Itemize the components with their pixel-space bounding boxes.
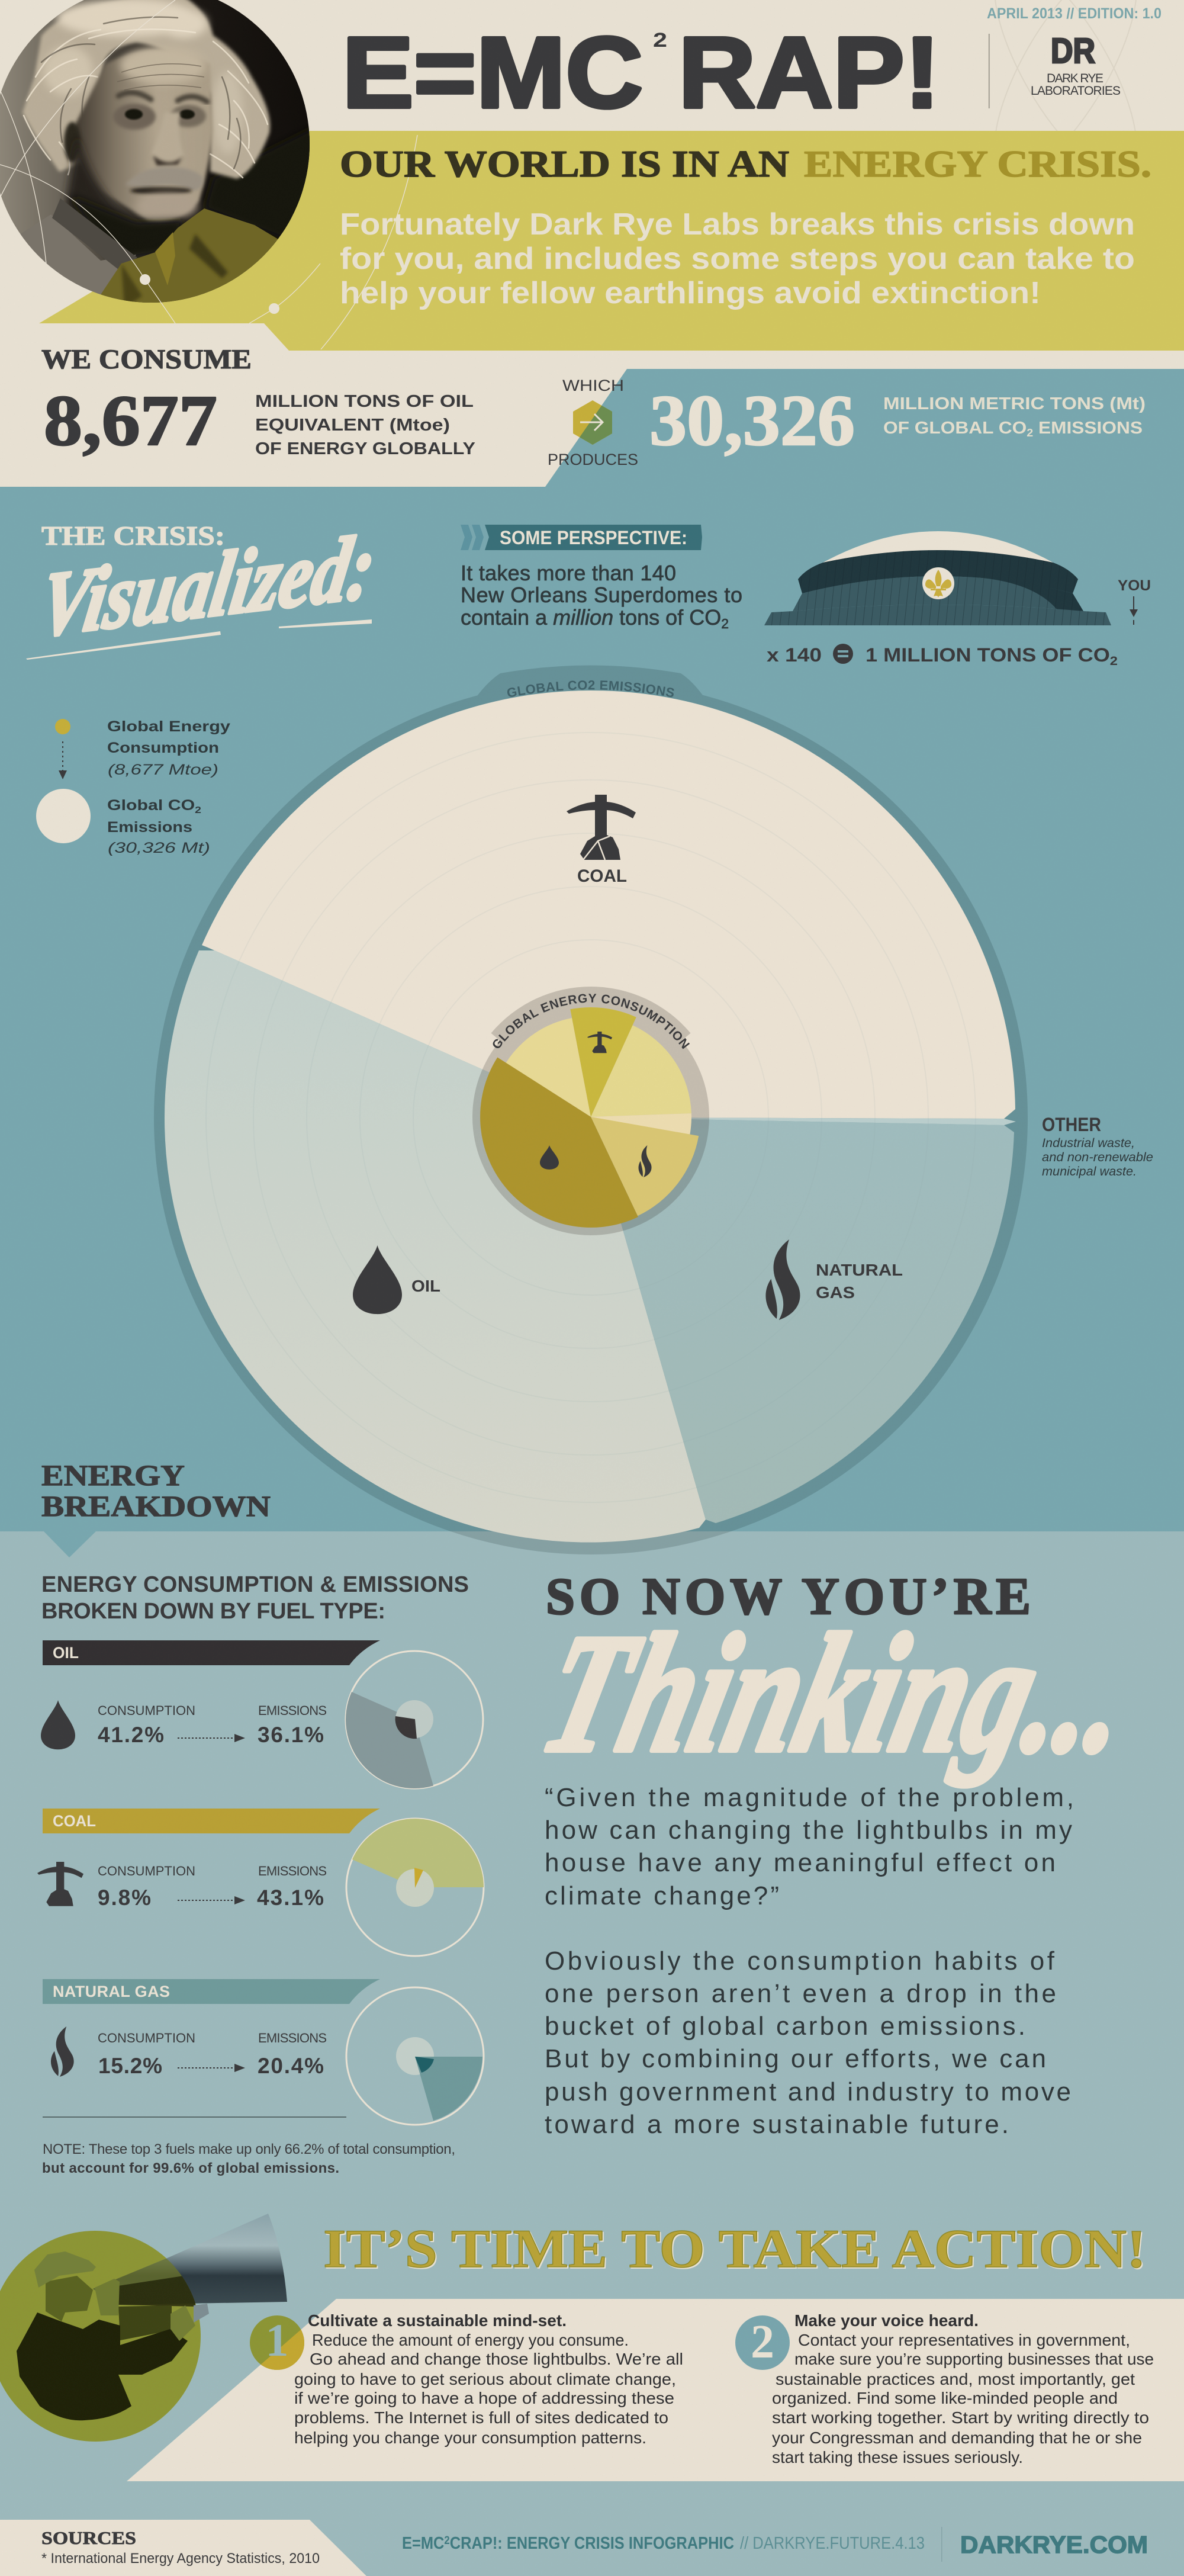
subheading: breakdown bbox=[41, 1572, 469, 1624]
dark interior bbox=[118, 2305, 172, 2340]
label: other bbox=[1042, 1114, 1153, 1178]
cap bbox=[34, 2251, 96, 2288]
logo: Dark Rye Laboratories: LABORATORIES bbox=[1031, 84, 1121, 98]
orbit lines with dots bbox=[0, 0, 417, 349]
row: coal bbox=[37, 1809, 484, 1956]
explanation paragraph: bucket of global carbon emissions. bbox=[545, 2012, 1025, 2041]
step 1 text: going to have to get serious about climate change, bbox=[294, 2370, 676, 2388]
equation: 140 superdomes bbox=[767, 644, 1118, 668]
row: oil: CONSUMPTION bbox=[98, 1703, 195, 1718]
stat: we consume bbox=[41, 344, 475, 461]
row: coal: 43.1% bbox=[257, 1886, 324, 1910]
ring label bbox=[379, 689, 803, 746]
label: oil: OIL bbox=[411, 1277, 440, 1295]
row: natural gas: CONSUMPTION bbox=[98, 2031, 195, 2045]
heading: it's time to take action: IT’S TIME TO TAKE ACTION! bbox=[324, 2220, 1147, 2280]
stat: emissions: 2 bbox=[1027, 427, 1033, 439]
title bbox=[342, 17, 940, 129]
legend bbox=[36, 718, 230, 856]
forehead highlight and wrinkles bbox=[120, 46, 205, 84]
yellow intro band bbox=[39, 131, 1184, 351]
legend: Global CO bbox=[107, 797, 179, 814]
icon: superdome bbox=[764, 531, 1111, 625]
connector: which produces bbox=[548, 377, 638, 468]
step 2 text: your Congressman and demanding that he or she bbox=[772, 2429, 1142, 2447]
row: natural gas: NATURAL GAS bbox=[53, 1983, 170, 2000]
quote paragraph: house have any meaningful effect on bbox=[545, 1848, 1056, 1877]
legend: Global Energy bbox=[107, 718, 230, 735]
nose bbox=[151, 113, 184, 161]
explanation paragraph: push government and industry to move bbox=[545, 2077, 1071, 2106]
row: coal: CONSUMPTION bbox=[98, 1864, 195, 1878]
explanation paragraph: Obviously the consumption habits of bbox=[545, 1947, 1055, 1976]
quote paragraph: “Given the magnitude of the problem, bbox=[545, 1783, 1074, 1812]
row: oil: OIL bbox=[53, 1644, 79, 1662]
hair mass bbox=[22, 0, 270, 179]
quote paragraph bbox=[545, 1783, 1074, 1910]
intro paragraph: Fortunately Dark Rye Labs breaks this crisis down bbox=[340, 207, 1135, 242]
row: coal: EMISSIONS bbox=[258, 1864, 327, 1878]
teal background section bbox=[0, 369, 1184, 1531]
footer credit: CRAP!: ENERGY CRISIS INFOGRAPHIC bbox=[450, 2534, 734, 2553]
wedge: oil bbox=[165, 950, 706, 1543]
sweater olive side bbox=[92, 208, 284, 314]
chart: global energy consumption pie: GLOBAL ENERGY CONSUMPTION bbox=[493, 994, 690, 1049]
footer credit: 2 bbox=[444, 2535, 450, 2547]
body bbox=[17, 2312, 188, 2420]
logo: Dark Rye Laboratories: DR bbox=[1051, 31, 1095, 70]
edition note: APRIL 2013 // EDITION: 1.0 bbox=[987, 5, 1162, 22]
hands bbox=[170, 2305, 195, 2341]
note: NOTE: These top 3 fuels make up only 66.2% of total consumption, bbox=[43, 2141, 455, 2157]
sources box: SOURCES bbox=[41, 2527, 136, 2548]
illustration: man with megaphone bbox=[0, 2214, 287, 2442]
step 1 text: helping you change your consumption patterns. bbox=[294, 2429, 646, 2447]
lower pale section bbox=[0, 1531, 1184, 2576]
neck shadow bbox=[70, 195, 184, 261]
tab pointer bbox=[44, 1531, 96, 1557]
quote paragraph: how can changing the lightbulbs in my bbox=[545, 1816, 1072, 1845]
banner: some perspective bbox=[461, 525, 702, 550]
row: coal: COAL bbox=[53, 1812, 96, 1830]
heading: so now you're: SO NOW YOU’RE bbox=[546, 1568, 1031, 1626]
legend: (8,677 Mtoe) bbox=[108, 762, 218, 778]
step 2 text: sustainable practices and, most importantly, get bbox=[776, 2370, 1135, 2388]
wedge: natural gas bbox=[591, 1117, 1014, 1523]
legend: Consumption bbox=[107, 740, 219, 756]
small icons bbox=[587, 1032, 612, 1053]
wedge: remainder left bbox=[506, 1018, 591, 1117]
heading: energy breakdown bbox=[41, 1459, 271, 1523]
step 2 text: start working together. Start by writing directly to bbox=[772, 2408, 1149, 2427]
stat: we consume: EQUIVALENT (Mtoe) bbox=[255, 416, 450, 435]
logo: Dark Rye Laboratories: DARK RYE bbox=[1047, 72, 1103, 85]
brows bbox=[118, 92, 207, 102]
legend: Emissions bbox=[107, 819, 192, 836]
step 1 text: problems. The Internet is full of sites dedicated to bbox=[294, 2408, 668, 2427]
hair strands bbox=[24, 17, 268, 178]
step 2 text: make sure you’re supporting businesses that use bbox=[794, 2350, 1154, 2368]
stat: emissions bbox=[649, 381, 1146, 461]
stat: emissions: OF GLOBAL CO bbox=[883, 419, 1015, 438]
label: coal: COAL bbox=[577, 866, 627, 886]
hair highlights bbox=[43, 0, 243, 154]
megaphone bbox=[93, 2214, 287, 2305]
chart: global energy consumption pie bbox=[472, 987, 709, 1235]
subheading: breakdown: ENERGY CONSUMPTION & EMISSIONS bbox=[41, 1572, 469, 1597]
step 1 text: Cultivate a sustainable mind-set. bbox=[308, 2311, 567, 2330]
label: coal bbox=[567, 795, 636, 886]
label: other: Industrial waste, bbox=[1042, 1136, 1135, 1150]
row: oil bbox=[41, 1640, 483, 1788]
face bbox=[72, 50, 213, 221]
equation: 140 superdomes: x 140 bbox=[767, 644, 822, 666]
step 1 badge: 1 bbox=[265, 2314, 289, 2366]
heading: the crisis visualized: Visualized: bbox=[33, 515, 382, 656]
chart: global CO2 emissions pie: GLOBAL CO2 EMISSIONS bbox=[507, 680, 674, 697]
step 2 text bbox=[772, 2311, 1154, 2466]
perspective text: 2 bbox=[721, 616, 729, 631]
face bbox=[46, 2276, 93, 2321]
step 1 text bbox=[294, 2311, 683, 2447]
stat: emissions: EMISSIONS bbox=[1033, 419, 1143, 438]
row: natural gas: EMISSIONS bbox=[258, 2031, 327, 2045]
footer credit bbox=[402, 2527, 942, 2562]
sources box: * International Energy Agency Statistics, 2010 bbox=[41, 2551, 320, 2567]
footer credit: // DARKRYE.FUTURE.4.13 bbox=[740, 2534, 925, 2553]
perspective text: New Orleans Superdomes to bbox=[461, 583, 742, 607]
step 2 text: Contact your representatives in government, bbox=[798, 2331, 1130, 2349]
step 1 badge bbox=[250, 2314, 304, 2370]
eyes bbox=[125, 109, 195, 120]
stat: we consume: OF ENERGY GLOBALLY bbox=[255, 439, 475, 458]
dark corner lower right bbox=[206, 126, 310, 239]
explanation paragraph: one person aren’t even a drop in the bbox=[545, 1979, 1056, 2008]
label: oil bbox=[353, 1245, 440, 1314]
explanation paragraph bbox=[545, 1947, 1071, 2139]
label: you arrow: YOU bbox=[1118, 577, 1151, 594]
row: natural gas: 15.2% bbox=[98, 2054, 162, 2078]
step 2 text: organized. Find some like-minded people and bbox=[772, 2389, 1118, 2407]
label: natural gas: NATURAL bbox=[816, 1261, 903, 1279]
mini pie: coal bbox=[346, 1819, 484, 1956]
label: natural gas: GAS bbox=[816, 1283, 855, 1302]
title: RAP! bbox=[678, 17, 940, 129]
wedge: oil bbox=[480, 1058, 638, 1228]
mini pie: oil bbox=[346, 1651, 483, 1788]
heading: it's time to take action: IT’S TIME TO TAKE ACTION! bbox=[323, 2218, 1146, 2279]
faint contour rings bbox=[206, 733, 976, 1502]
eye sockets bbox=[113, 104, 156, 130]
decorative atom watermark bbox=[968, 0, 1163, 195]
row: natural gas bbox=[43, 1979, 484, 2125]
heading: energy breakdown: BREAKDOWN bbox=[41, 1489, 271, 1523]
stat: emissions: MILLION METRIC TONS (Mt) bbox=[883, 394, 1146, 413]
row: natural gas: 20.4% bbox=[258, 2054, 324, 2078]
legend: 2 bbox=[195, 805, 201, 815]
chin bbox=[136, 193, 198, 219]
wedge: coal bbox=[202, 690, 1015, 1119]
explanation paragraph: toward a more sustainable future. bbox=[545, 2110, 1009, 2139]
stat: we consume: MILLION TONS OF OIL bbox=[255, 392, 474, 411]
arc label bbox=[492, 1003, 690, 1059]
logo: Dark Rye Laboratories bbox=[989, 31, 1121, 108]
step 1 text: Reduce the amount of energy you consume. bbox=[312, 2331, 629, 2349]
perspective text: It takes more than 140 bbox=[461, 561, 676, 585]
intro paragraph: help your fellow earthlings avoid extinction! bbox=[340, 276, 1041, 310]
sources box bbox=[0, 2520, 366, 2576]
row: coal: 9.8% bbox=[98, 1886, 151, 1910]
intro paragraph bbox=[340, 207, 1135, 310]
chart: global CO2 emissions pie bbox=[154, 666, 1028, 1554]
outer ring with label tab bbox=[154, 666, 1028, 1554]
label: other: municipal waste. bbox=[1042, 1165, 1137, 1178]
cream action panel bbox=[127, 2299, 1184, 2481]
title: 2 bbox=[653, 29, 667, 52]
perspective text: contain a million tons of CO bbox=[461, 605, 721, 629]
mini pie: natural gas bbox=[346, 1987, 484, 2125]
intro paragraph: for you, and includes some steps you can take to bbox=[340, 242, 1135, 276]
label: other: and non-renewable bbox=[1042, 1151, 1153, 1164]
ear and cheek shadow bbox=[64, 122, 81, 162]
title: E=MC bbox=[342, 17, 643, 129]
equation: 140 superdomes: 2 bbox=[1110, 654, 1118, 668]
step 2 badge: 2 bbox=[751, 2316, 774, 2368]
headline: energy crisis: ENERGY CRISIS. bbox=[804, 143, 1151, 185]
quote paragraph: climate change?” bbox=[545, 1881, 779, 1910]
headline: energy crisis bbox=[340, 143, 1151, 185]
explanation paragraph: But by combining our efforts, we can bbox=[545, 2044, 1046, 2073]
perspective text bbox=[461, 561, 742, 631]
row: oil: 36.1% bbox=[258, 1723, 324, 1747]
footer credit: E=MC bbox=[402, 2534, 450, 2553]
grey ring and tab bbox=[472, 987, 709, 1235]
label: other: OTHER bbox=[1042, 1114, 1101, 1135]
headline: energy crisis: OUR WORLD IS IN AN bbox=[340, 143, 789, 185]
sweater grey side bbox=[18, 214, 136, 308]
wedge: coal bbox=[570, 1007, 636, 1117]
footer logo: DARKRYE.COM bbox=[960, 2531, 1148, 2558]
portrait of Einstein bbox=[0, 0, 320, 314]
step 1 text: if we’re going to have a hope of addressing these bbox=[294, 2389, 674, 2407]
wedge: remainder right bbox=[591, 1025, 691, 1117]
wedge: natural gas bbox=[591, 1117, 699, 1216]
equation: 140 superdomes: 1 MILLION TONS OF CO bbox=[866, 644, 1082, 666]
stat: emissions: 30,326 bbox=[649, 381, 855, 461]
heading: energy breakdown: ENERGY bbox=[41, 1459, 185, 1492]
banner: some perspective: SOME PERSPECTIVE: bbox=[500, 527, 687, 548]
stat: we consume: WE CONSUME bbox=[41, 344, 252, 375]
connector: which produces: PRODUCES bbox=[548, 451, 638, 468]
subheading: breakdown: BROKEN DOWN BY FUEL TYPE: bbox=[41, 1599, 385, 1624]
moustache bbox=[126, 167, 202, 191]
step 2 text: Make your voice heard. bbox=[794, 2311, 979, 2330]
note bbox=[42, 2116, 455, 2176]
step 2 badge bbox=[735, 2315, 790, 2370]
label: you arrow bbox=[1118, 577, 1151, 625]
connector: which produces: WHICH bbox=[562, 377, 624, 394]
heading: the crisis visualized: THE CRISIS: bbox=[41, 521, 225, 551]
legend: (30,326 Mt) bbox=[108, 840, 210, 856]
step 1 text: Go ahead and change those lightbulbs. We’re all bbox=[310, 2350, 683, 2368]
row: oil: 41.2% bbox=[98, 1723, 164, 1747]
wedge: other bbox=[591, 1117, 1016, 1125]
label: natural gas bbox=[765, 1239, 903, 1320]
row: oil: EMISSIONS bbox=[258, 1703, 327, 1718]
wedge: other bbox=[591, 1113, 691, 1136]
step 2 text: start taking these issues seriously. bbox=[772, 2448, 1023, 2466]
stat: we consume: 8,677 bbox=[44, 381, 217, 461]
note: but account for 99.6% of global emissions. bbox=[42, 2160, 339, 2176]
